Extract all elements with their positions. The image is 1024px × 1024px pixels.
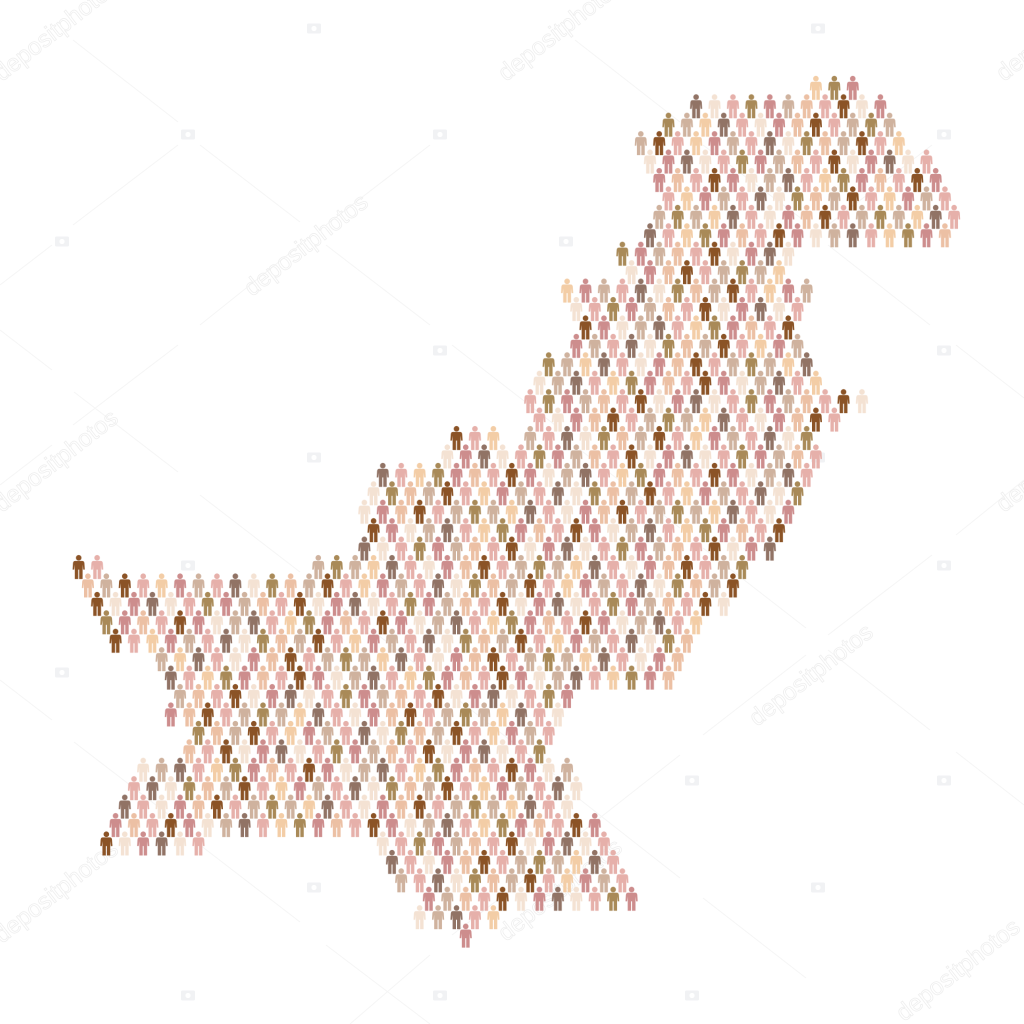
figure rows: western arm and main body bbox=[69, 554, 751, 764]
figure rows: southern coast bbox=[97, 757, 641, 949]
watermark: faint stock-photo text, lines and camera marks: depositphotos bbox=[744, 618, 878, 732]
watermark: faint stock-photo text, lines and camera marks: depositphotos bbox=[493, 833, 627, 947]
figure rows: upper central band bbox=[521, 241, 871, 432]
figure rows: northern territories bbox=[632, 75, 963, 248]
figure rows: middle band bbox=[355, 425, 825, 561]
map: Pakistan formed from stick figures bbox=[69, 75, 963, 949]
watermark: faint stock-photo text, lines and camera marks: depositphotos bbox=[239, 188, 373, 302]
